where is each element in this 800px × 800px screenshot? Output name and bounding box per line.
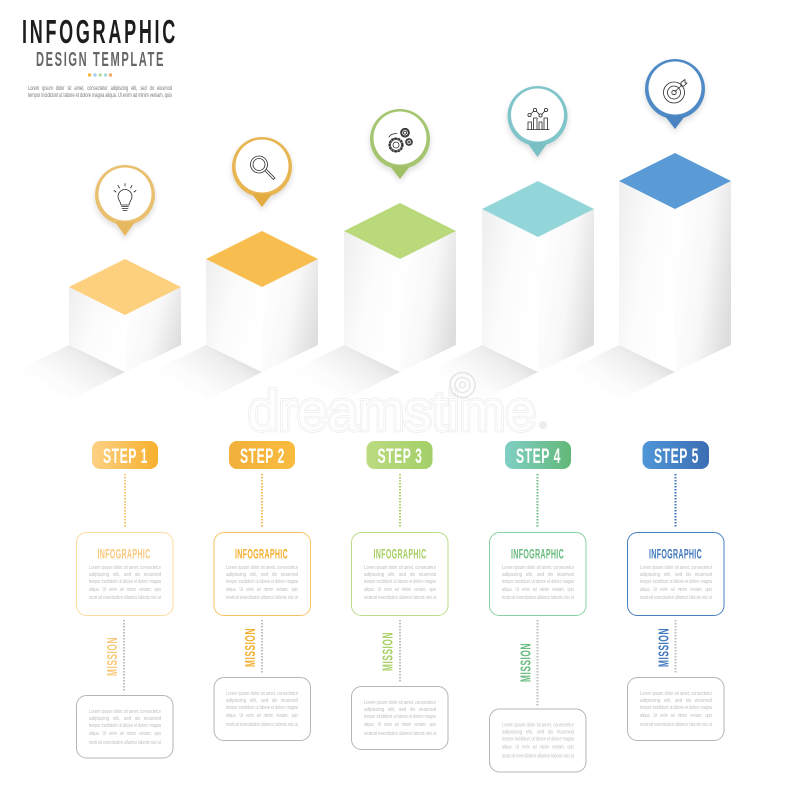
info card 2: aliqua. Ut enim ad minim veniam, quis	[226, 587, 298, 593]
intro text	[28, 85, 172, 99]
step 4 label	[505, 441, 571, 469]
detail card 4: tempor incididunt ut labore et dolore magna	[502, 736, 574, 742]
step 2 label	[229, 441, 295, 469]
info card 2: INFOGRAPHIC	[235, 546, 288, 562]
info card 5: tempor incididunt ut labore et dolore magna	[640, 579, 712, 585]
info card 5: nostrud exercitation ullamco laboris nisi ut	[640, 595, 712, 601]
detail card 3: tempor incididunt ut labore et dolore magna	[364, 714, 436, 720]
icon: target	[664, 80, 687, 103]
info card 4: adipiscing elit, sed do eiusmod	[502, 572, 574, 578]
info card 4: nostrud exercitation ullamco laboris nisi ut	[502, 595, 574, 601]
intro text: Lorem ipsum dolor sit amet, consectetur adipiscing elit, sed do eiusmod	[28, 85, 172, 92]
icon: gears	[389, 128, 412, 152]
detail card 4: aliqua. Ut enim ad minim veniam, quis	[502, 744, 574, 750]
intro text: tempor incididunt ut labore et dolore magna aliqua. Ut enim ad minim veniam, quis	[28, 92, 172, 99]
info card 5: aliqua. Ut enim ad minim veniam, quis	[640, 587, 712, 593]
info card 3: nostrud exercitation ullamco laboris nisi ut	[364, 595, 436, 601]
title: INFOGRAPHIC	[22, 13, 178, 50]
icon: magnifier	[250, 156, 275, 180]
mission label 4: MISSION	[518, 643, 534, 682]
info card 4: Lorem ipsum dolor sit amet, consectetur	[502, 565, 574, 571]
detail card 2: Lorem ipsum dolor sit amet, consectetur	[226, 691, 298, 697]
info card 5: Lorem ipsum dolor sit amet, consectetur	[640, 565, 712, 571]
icon: light bulb	[114, 184, 136, 210]
detail card 2: adipiscing elit, sed do eiusmod	[226, 698, 298, 704]
detail card 4: Lorem ipsum dolor sit amet, consectetur	[502, 722, 574, 728]
detail card 1: Lorem ipsum dolor sit amet, consectetur	[89, 709, 161, 715]
detail card 3: adipiscing elit, sed do eiusmod	[364, 707, 436, 713]
info card 1: tempor incididunt ut labore et dolore magna	[89, 579, 161, 585]
pin 1: light bulb	[95, 165, 155, 236]
detail card 2: nostrud exercitation ullamco laboris nisi ut	[226, 722, 298, 728]
detail card 5: Lorem ipsum dolor sit amet, consectetur	[640, 691, 712, 697]
connector 2	[261, 474, 263, 528]
info card 5: INFOGRAPHIC	[649, 546, 702, 562]
info card 1: Lorem ipsum dolor sit amet, consectetur	[89, 565, 161, 571]
subtitle: DESIGN TEMPLATE	[36, 48, 165, 71]
gray connector 5	[674, 620, 676, 674]
info card 2: adipiscing elit, sed do eiusmod	[226, 572, 298, 578]
column 2	[214, 441, 310, 740]
detail card 4: adipiscing elit, sed do eiusmod	[502, 730, 574, 736]
bar 2	[151, 231, 318, 400]
info card 1: aliqua. Ut enim ad minim veniam, quis	[89, 587, 161, 593]
watermark: dreamstime	[248, 379, 536, 442]
detail card 2: tempor incididunt ut labore et dolore magna	[226, 705, 298, 711]
detail card 5: aliqua. Ut enim ad minim veniam, quis	[640, 713, 712, 719]
bar 5	[564, 153, 731, 400]
info card 4	[490, 532, 586, 616]
detail card 4	[490, 709, 586, 772]
mission label 1: MISSION	[104, 637, 121, 676]
mission label 2: MISSION	[242, 628, 259, 667]
bar 4	[427, 181, 594, 400]
info card 2: tempor incididunt ut labore et dolore magna	[226, 579, 298, 585]
detail card 1	[76, 696, 173, 758]
info card 5	[628, 532, 724, 616]
mission label 3: MISSION	[380, 632, 396, 671]
detail card 2: aliqua. Ut enim ad minim veniam, quis	[226, 713, 298, 719]
gray connector 1	[123, 620, 125, 692]
info card 3: aliqua. Ut enim ad minim veniam, quis	[364, 587, 436, 593]
info card 2: Lorem ipsum dolor sit amet, consectetur	[226, 565, 298, 571]
pin 5: target	[645, 59, 705, 129]
step 5 label	[642, 441, 709, 469]
icon: chart	[527, 108, 549, 130]
watermark: dreamstime	[248, 379, 536, 442]
column 4	[490, 441, 586, 772]
watermark: dreamstime	[248, 379, 536, 442]
bar 1	[14, 259, 181, 400]
detail card 1: adipiscing elit, sed do eiusmod	[89, 716, 161, 722]
info card 5: adipiscing elit, sed do eiusmod	[640, 572, 712, 578]
colour dots	[88, 73, 112, 77]
column 5	[628, 441, 724, 740]
column 1	[76, 441, 173, 758]
step 1 label: STEP 1	[103, 444, 148, 468]
info card 1	[76, 532, 173, 616]
step 4 label: STEP 4	[516, 444, 561, 468]
info card 3: adipiscing elit, sed do eiusmod	[364, 572, 436, 578]
detail card 1: aliqua. Ut enim ad minim veniam, quis	[89, 731, 161, 737]
detail card 3: aliqua. Ut enim ad minim veniam, quis	[364, 722, 436, 728]
info card 1: nostrud exercitation ullamco laboris nisi ut	[89, 595, 161, 601]
title block	[22, 13, 178, 99]
detail card 3: Lorem ipsum dolor sit amet, consectetur	[364, 700, 436, 706]
info card 3: INFOGRAPHIC	[374, 546, 426, 562]
detail card 1: nostrud exercitation ullamco laboris nisi ut	[89, 740, 161, 746]
detail card 4: nostrud exercitation ullamco laboris nisi ut	[502, 754, 574, 760]
info card 4: INFOGRAPHIC	[511, 546, 564, 562]
detail card 5: nostrud exercitation ullamco laboris nisi ut	[640, 722, 712, 728]
step 5 label: STEP 5	[654, 444, 699, 468]
info card 3	[352, 532, 448, 616]
detail card 3	[352, 686, 448, 750]
connector 4	[536, 474, 538, 528]
info card 2: nostrud exercitation ullamco laboris nisi ut	[226, 595, 298, 601]
gray connector 4	[536, 620, 538, 706]
info card 3: Lorem ipsum dolor sit amet, consectetur	[364, 565, 436, 571]
info card 3: tempor incididunt ut labore et dolore magna	[364, 579, 436, 585]
connector 3	[399, 474, 401, 528]
step 1 label	[92, 441, 158, 469]
detail card 5: adipiscing elit, sed do eiusmod	[640, 698, 712, 704]
bar 3	[289, 203, 456, 400]
detail card 1: tempor incididunt ut labore et dolore magna	[89, 723, 161, 729]
info card 4: aliqua. Ut enim ad minim veniam, quis	[502, 587, 574, 593]
gray connector 2	[261, 620, 263, 674]
detail card 3: nostrud exercitation ullamco laboris nisi ut	[364, 731, 436, 737]
info card 1: INFOGRAPHIC	[98, 546, 150, 562]
info card 2	[214, 532, 310, 616]
pin 2: magnifier	[232, 137, 292, 207]
column 3	[352, 441, 448, 750]
detail card 5	[628, 678, 724, 740]
connector 5	[674, 474, 676, 528]
step 3 label: STEP 3	[378, 444, 422, 468]
info card 4: tempor incididunt ut labore et dolore magna	[502, 579, 574, 585]
connector 1	[124, 474, 126, 528]
gray connector 3	[399, 620, 401, 683]
detail card 5: tempor incididunt ut labore et dolore magna	[640, 705, 712, 711]
step 2 label: STEP 2	[240, 444, 285, 468]
info card 1: adipiscing elit, sed do eiusmod	[89, 572, 161, 578]
detail card 2	[214, 678, 310, 740]
pin 4: chart	[508, 86, 568, 157]
step 3 label	[366, 441, 432, 469]
mission label 5: MISSION	[656, 628, 672, 667]
pin 3: gears	[370, 109, 430, 179]
